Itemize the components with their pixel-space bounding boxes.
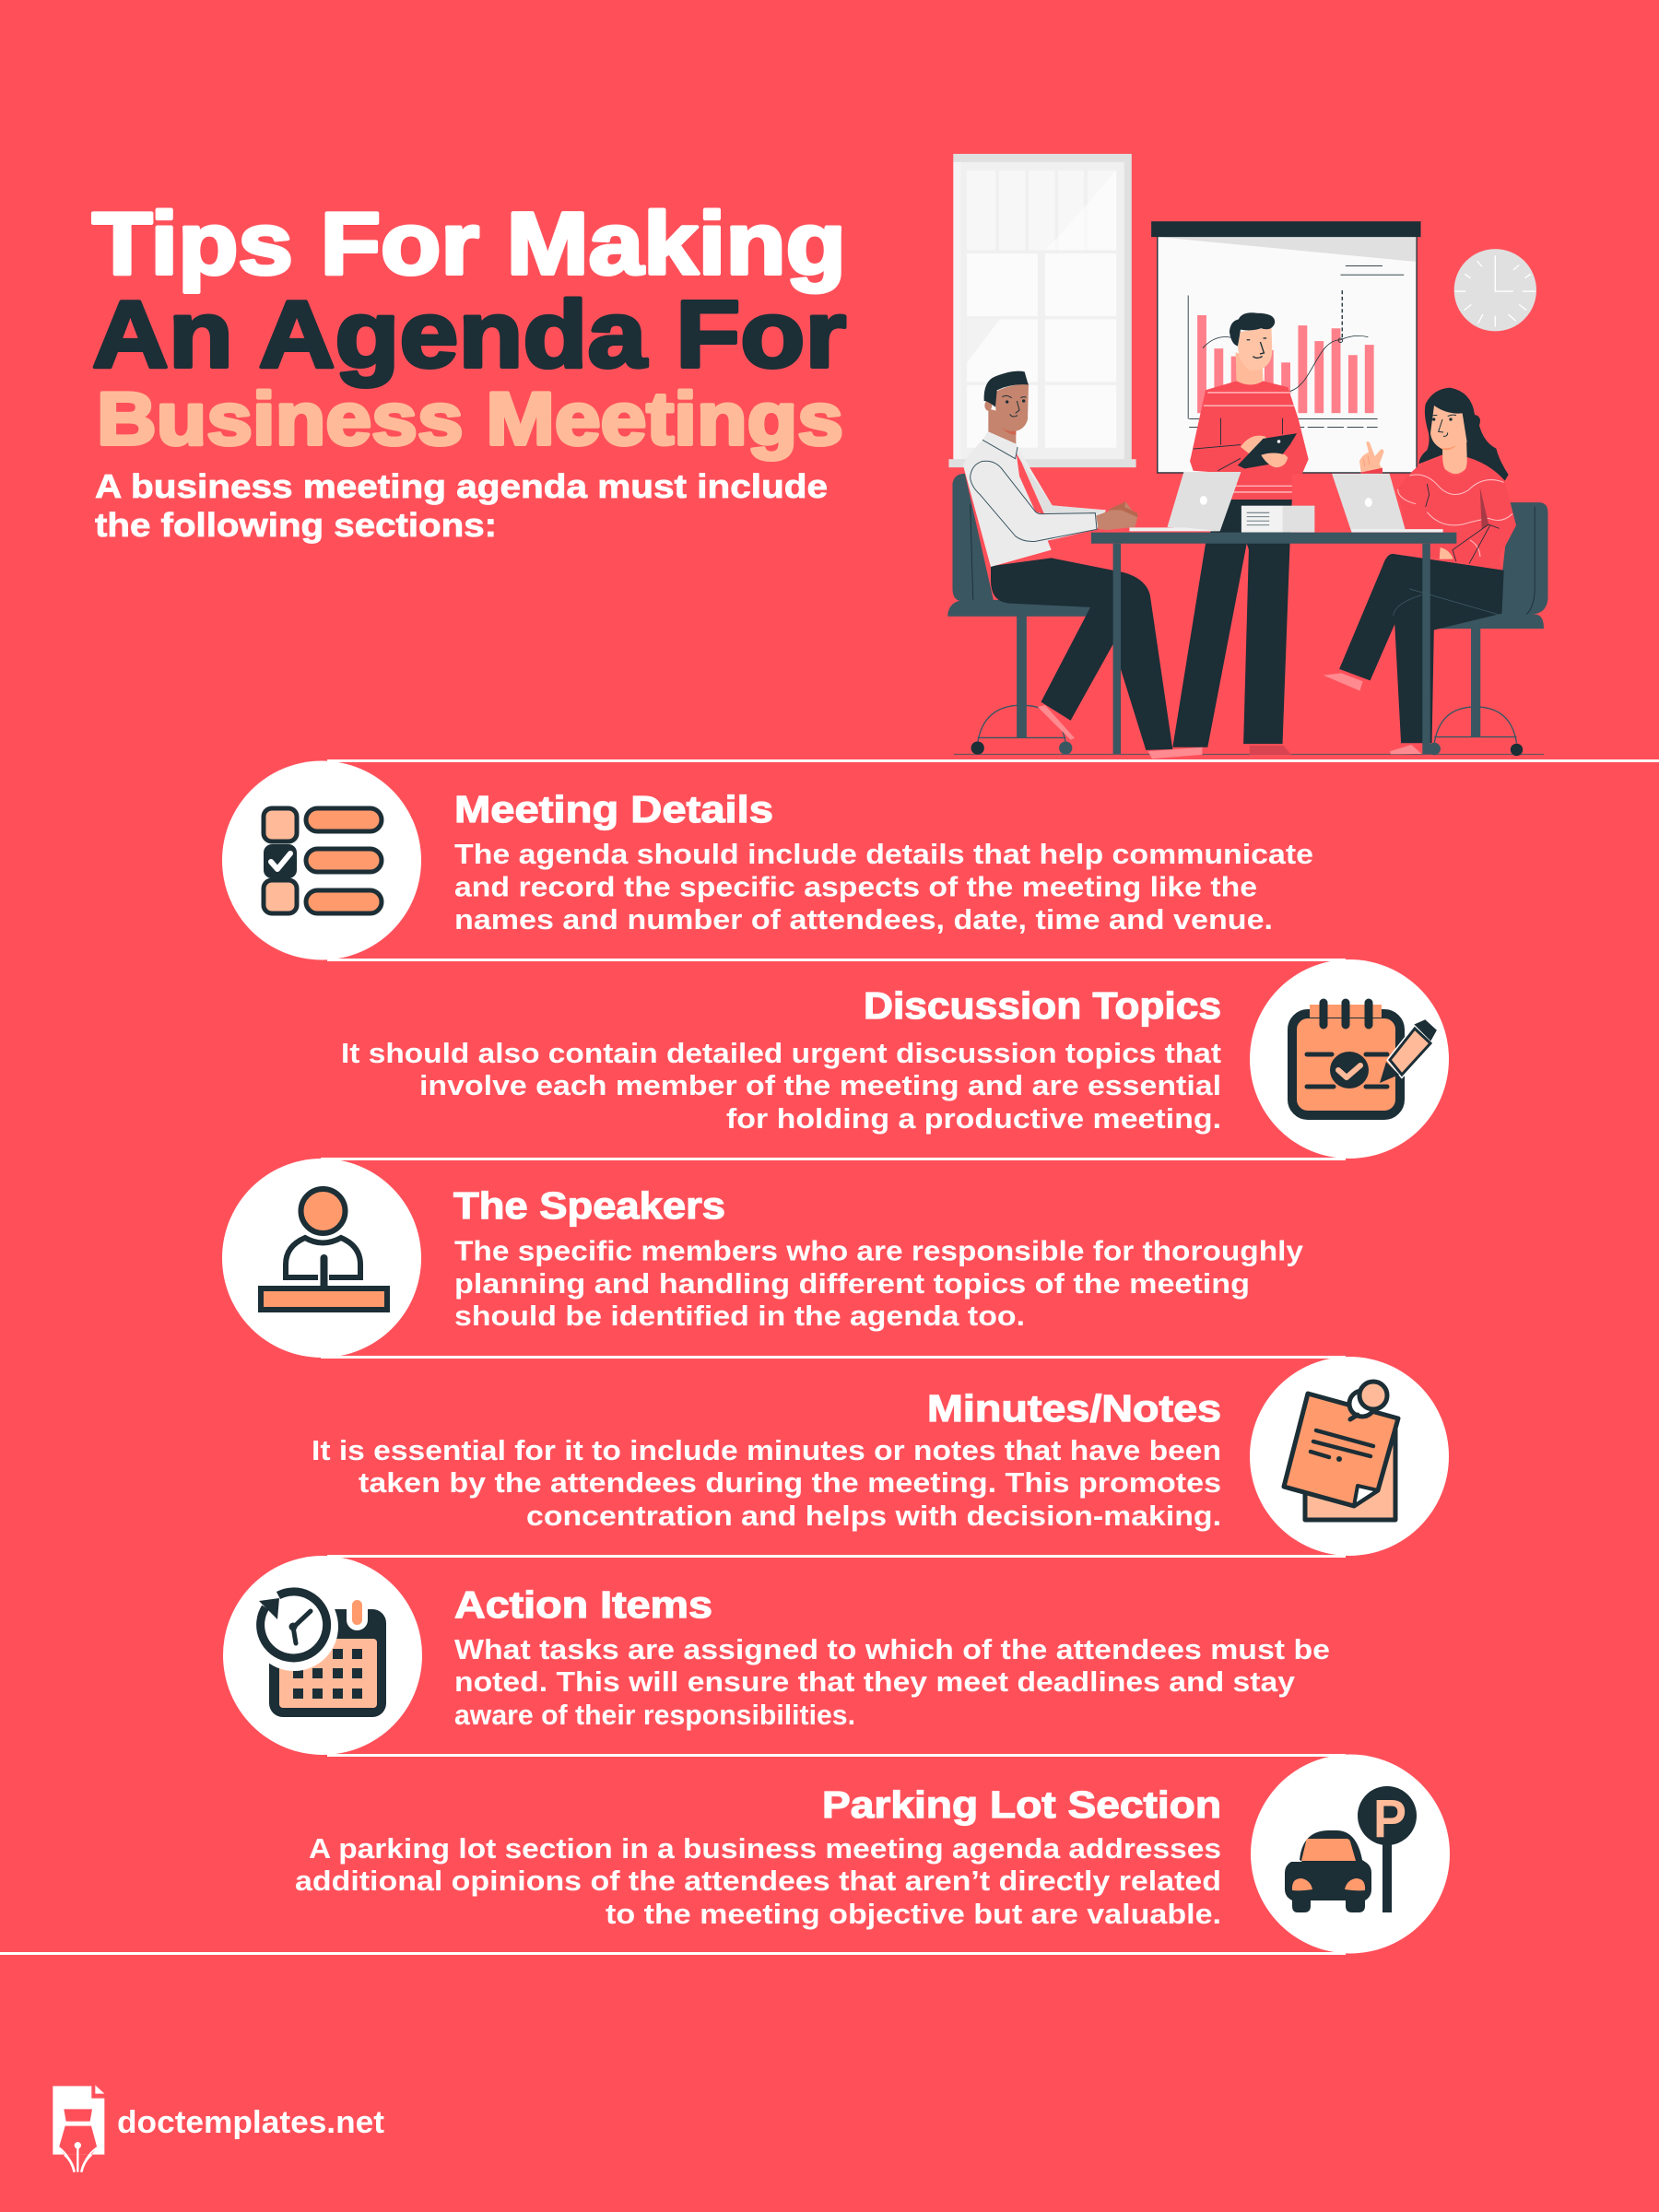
heading: Action Items [454, 1583, 712, 1626]
icon: calendar with clock [223, 1556, 422, 1755]
heading: Minutes/Notes [927, 1387, 1221, 1430]
man seated on the left [947, 371, 1172, 755]
icon: calendar with pencil [1250, 959, 1449, 1159]
heading: Meeting Details [454, 788, 773, 830]
illustration: business meeting [947, 154, 1547, 759]
text block: additional opinions of the attendees that aren’t directly related [295, 1865, 1221, 1897]
heading: Discussion Topics [864, 984, 1221, 1027]
icon: speaker at podium [222, 1159, 421, 1358]
text block [454, 1633, 1330, 1731]
icon: checklist [222, 761, 421, 960]
heading: The Speakers [453, 1184, 725, 1227]
text block: involve each member of the meeting and are essential [419, 1069, 1221, 1101]
panel: minutes and notes [312, 1357, 1449, 1556]
divider lines [0, 759, 1659, 1955]
text block: planning and handling different topics of the meeting [454, 1267, 1250, 1300]
table [1091, 533, 1456, 754]
text block [312, 1434, 1221, 1532]
icon: pinned note [1250, 1357, 1449, 1556]
clock [1454, 249, 1536, 331]
title [92, 194, 846, 461]
text block: to the meeting objective but are valuable. [606, 1898, 1221, 1930]
title: Business Meetings [97, 378, 843, 461]
subtitle [95, 467, 828, 544]
text block: It is essential for it to include minutes or notes that have been [312, 1434, 1221, 1466]
brand name: doctemplates.net [117, 2105, 384, 2140]
ground line [954, 753, 1544, 755]
window [948, 154, 1136, 467]
icon: car and parking sign [1251, 1755, 1450, 1954]
icon: car and parking sign: P [1373, 1789, 1406, 1849]
box on the table [1241, 506, 1314, 533]
text block [454, 838, 1313, 935]
footer logo [53, 2085, 384, 2172]
text block [295, 1832, 1221, 1930]
text block: noted. This will ensure that they meet deadlines and stay [454, 1665, 1296, 1698]
text block: A parking lot section in a business meeting agenda addresses [309, 1832, 1221, 1865]
text block [341, 1037, 1221, 1135]
text block: It should also contain detailed urgent discussion topics that [341, 1037, 1221, 1069]
text block: and record the specific aspects of the meeting like the [454, 870, 1257, 903]
heading: Parking Lot Section [822, 1783, 1221, 1826]
title: An Agenda For [92, 281, 846, 387]
panel: meeting details [222, 761, 1313, 960]
text block: The agenda should include details that help communicate [454, 838, 1313, 870]
panel: the speakers [222, 1159, 1304, 1358]
laptops [1129, 472, 1443, 533]
text block: taken by the attendees during the meeting. This promotes [359, 1466, 1221, 1499]
text block: aware of their responsibilities. [454, 1699, 855, 1731]
panel: parking lot section [295, 1755, 1450, 1954]
icon: document with pen nib [53, 2085, 104, 2172]
text block: The specific members who are responsible for thoroughly [454, 1235, 1304, 1266]
text block: What tasks are assigned to which of the attendees must be [454, 1633, 1330, 1665]
text block: for holding a productive meeting. [726, 1102, 1221, 1135]
projector screen with chart [1151, 221, 1421, 473]
panel: discussion topics [341, 959, 1449, 1159]
text block: names and number of attendees, date, time and venue. [454, 903, 1273, 935]
title: Tips For Making [92, 194, 846, 293]
text block [454, 1235, 1304, 1332]
standing man [1148, 312, 1309, 759]
text block: concentration and helps with decision-making. [526, 1500, 1221, 1532]
subtitle: A business meeting agenda must include [95, 467, 828, 505]
woman seated on the right [1324, 388, 1547, 756]
text block: should be identified in the agenda too. [454, 1300, 1025, 1332]
panel: action items [223, 1556, 1330, 1755]
subtitle: the following sections: [95, 506, 497, 544]
